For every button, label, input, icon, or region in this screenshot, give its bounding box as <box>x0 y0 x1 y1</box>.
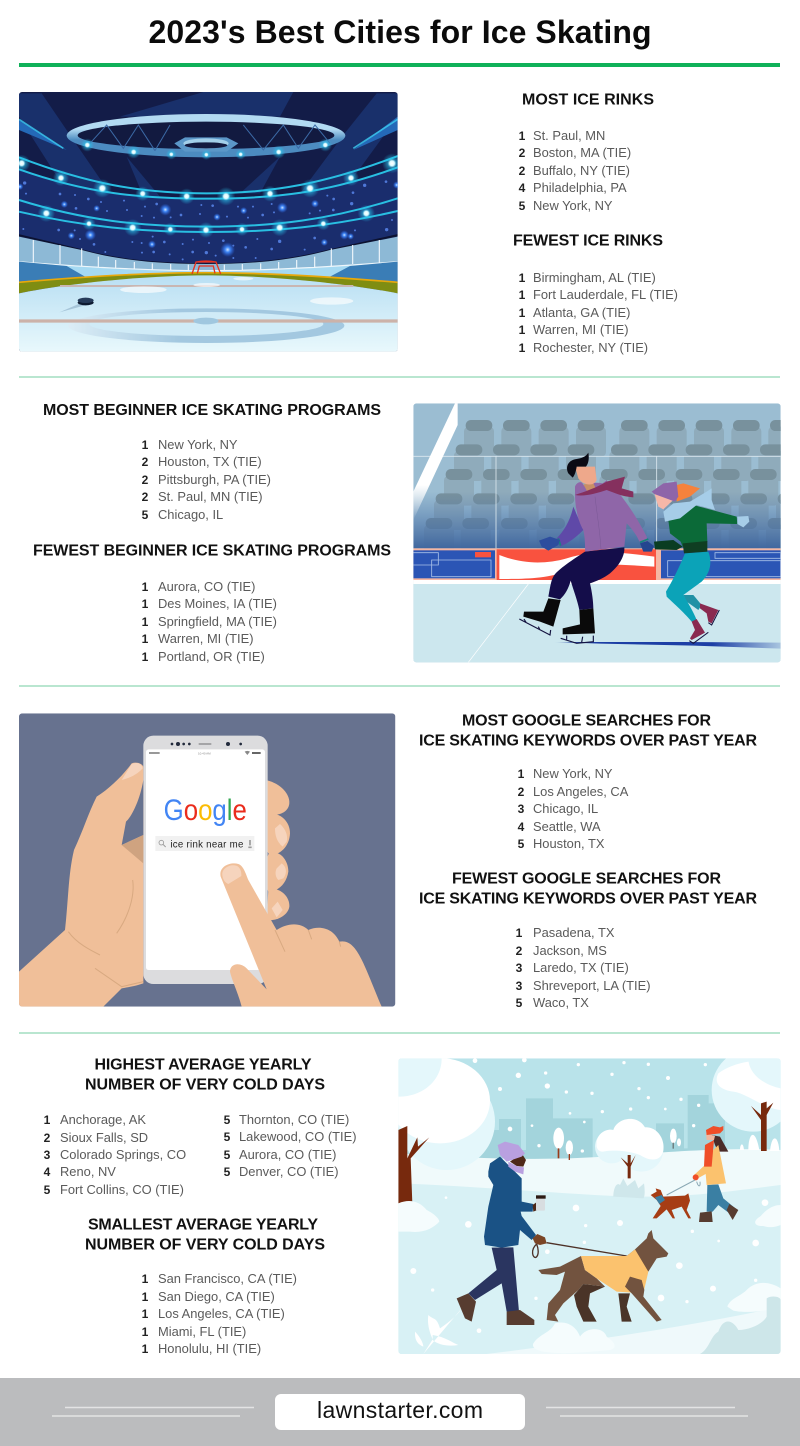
ranking list: 2 <box>519 164 526 178</box>
footer website: lawnstarter.com <box>317 1397 483 1423</box>
ranking list: 1 <box>519 271 526 285</box>
ranking list: Springfield, MA (TIE) <box>158 614 277 629</box>
title underline <box>19 63 780 67</box>
ranking list: Los Angeles, CA <box>533 784 629 799</box>
panel: fewest ice rinks <box>513 232 678 355</box>
leaves <box>415 1308 462 1354</box>
ranking list <box>142 437 271 522</box>
ranking list: 1 <box>519 323 526 337</box>
heading: MOST GOOGLE SEARCHES FOR <box>462 712 711 730</box>
ranking list <box>142 1271 297 1356</box>
ranking list, left column: 4 <box>44 1165 51 1179</box>
ranking list: New York, NY <box>533 766 613 781</box>
heading line 2: ICE SKATING KEYWORDS OVER PAST YEAR <box>419 890 757 908</box>
ranking list: 4 <box>518 820 525 834</box>
ranking list: 1 <box>519 341 526 355</box>
ranking list, right column: 5 <box>224 1130 231 1144</box>
ranking list: 4 <box>519 181 526 195</box>
phone <box>143 736 268 984</box>
footer band <box>0 1378 800 1446</box>
ranking list: Los Angeles, CA (TIE) <box>158 1306 285 1321</box>
ranking list: Jackson, MS <box>533 943 607 958</box>
ranking list: 5 <box>519 199 526 213</box>
ranking list: 5 <box>516 996 523 1010</box>
trees <box>398 1058 781 1204</box>
woman skater <box>652 482 749 643</box>
large dog with coat <box>538 1230 668 1322</box>
ranking list, right column: Denver, CO (TIE) <box>239 1164 339 1179</box>
left hand <box>19 763 143 1007</box>
ranking list <box>516 925 650 1010</box>
ranking list: 1 <box>142 632 149 646</box>
ranking list, left column: 5 <box>44 1183 51 1197</box>
ranking list: Philadelphia, PA <box>533 180 627 195</box>
heading: FEWEST ICE RINKS <box>513 232 663 250</box>
right hand pointing <box>220 863 382 1007</box>
ranking list: Atlanta, GA (TIE) <box>533 305 630 320</box>
ranking list, left column: Reno, NV <box>60 1164 116 1179</box>
ranking list: San Francisco, CA (TIE) <box>158 1271 297 1286</box>
ranking list: Rochester, NY (TIE) <box>533 340 648 355</box>
title: 2023's Best Cities for Ice Skating <box>148 14 652 50</box>
heading line 2: NUMBER OF VERY COLD DAYS <box>85 1076 325 1094</box>
ranking list, left column: 3 <box>44 1148 51 1162</box>
ranking list, right column: 5 <box>224 1148 231 1162</box>
ranking list: 1 <box>519 129 526 143</box>
ranking list: 1 <box>516 926 523 940</box>
ranking list: 1 <box>142 615 149 629</box>
illustration: phone google search <box>19 713 395 1007</box>
ranking list: New York, NY <box>158 437 238 452</box>
ranking list: Chicago, IL <box>533 801 598 816</box>
ranking list: 5 <box>142 508 149 522</box>
ranking list: Portland, OR (TIE) <box>158 649 265 664</box>
ranking list: 2 <box>519 146 526 160</box>
ranking list: 3 <box>516 961 523 975</box>
google logo: Google <box>164 793 247 826</box>
search bar <box>155 836 254 851</box>
heading: SMALLEST AVERAGE YEARLY <box>88 1216 318 1234</box>
ranking list: 1 <box>142 1325 149 1339</box>
heading line 2: NUMBER OF VERY COLD DAYS <box>85 1236 325 1254</box>
snowflakes <box>410 1058 768 1333</box>
ranking list: 3 <box>518 802 525 816</box>
ranking list: 1 <box>519 288 526 302</box>
ranking list, left column: Sioux Falls, SD <box>60 1130 148 1145</box>
person with blue jacket <box>457 1142 627 1325</box>
ranking list, left column: Fort Collins, CO (TIE) <box>60 1182 184 1197</box>
ranking list: Buffalo, NY (TIE) <box>533 163 630 178</box>
small dog <box>651 1188 691 1218</box>
illustration: couple skating <box>413 403 800 664</box>
ranking list: St. Paul, MN <box>533 128 605 143</box>
ranking list: Warren, MI (TIE) <box>533 322 628 337</box>
ranking list: Pittsburgh, PA (TIE) <box>158 472 271 487</box>
ranking list: San Diego, CA (TIE) <box>158 1289 275 1304</box>
ranking list: 2 <box>518 785 525 799</box>
ranking list: 2 <box>516 944 523 958</box>
ranking list: Houston, TX (TIE) <box>158 454 262 469</box>
illustration: hockey arena <box>13 92 402 352</box>
ranking list, right column: Thornton, CO (TIE) <box>239 1112 349 1127</box>
illustration: walking dogs in snow <box>390 1048 795 1354</box>
ranking list, left column: 2 <box>44 1131 51 1145</box>
ranking list: Laredo, TX (TIE) <box>533 960 629 975</box>
ranking list: 2 <box>142 490 149 504</box>
fingers behind phone <box>268 780 290 920</box>
panel: fewest google searches <box>419 870 757 1010</box>
ranking list: Waco, TX <box>533 995 589 1010</box>
ranking list, left column: Colorado Springs, CO <box>60 1147 186 1162</box>
ranking list: 1 <box>142 580 149 594</box>
ranking list: Honolulu, HI (TIE) <box>158 1341 261 1356</box>
ranking list: 2 <box>142 473 149 487</box>
ranking list, left column: Anchorage, AK <box>60 1112 146 1127</box>
ranking list: 1 <box>142 1307 149 1321</box>
person in yellow coat <box>667 1126 738 1222</box>
panel: most beginner programs <box>43 402 381 522</box>
ranking list: Warren, MI (TIE) <box>158 631 253 646</box>
ranking list: Birmingham, AL (TIE) <box>533 270 656 285</box>
heading: HIGHEST AVERAGE YEARLY <box>94 1056 312 1074</box>
heading: MOST BEGINNER ICE SKATING PROGRAMS <box>43 402 381 419</box>
ranking list: Shreveport, LA (TIE) <box>533 978 650 993</box>
ranking list: 5 <box>518 837 525 851</box>
ranking list: 2 <box>142 455 149 469</box>
ranking list: New York, NY <box>533 198 613 213</box>
heading: MOST ICE RINKS <box>522 92 654 108</box>
heading: FEWEST GOOGLE SEARCHES FOR <box>452 870 721 888</box>
ranking list, right column <box>224 1112 356 1179</box>
panel: fewest beginner programs <box>33 542 391 664</box>
ranking list: Seattle, WA <box>533 819 601 834</box>
heading: FEWEST BEGINNER ICE SKATING PROGRAMS <box>33 542 391 560</box>
ranking list, right column: Lakewood, CO (TIE) <box>239 1129 356 1144</box>
ranking list, left column <box>44 1112 186 1197</box>
search bar: ice rink near me <box>170 839 243 850</box>
panel: most ice rinks <box>519 92 654 213</box>
ranking list: Houston, TX <box>533 836 605 851</box>
phone: 10:40 AM <box>198 752 211 756</box>
ranking list, right column: 5 <box>224 1165 231 1179</box>
ranking list: 1 <box>142 1290 149 1304</box>
ranking list: St. Paul, MN (TIE) <box>158 489 263 504</box>
man skater <box>519 453 654 643</box>
ranking list: Pasadena, TX <box>533 925 615 940</box>
ranking list: 3 <box>516 979 523 993</box>
ranking list <box>518 766 629 851</box>
ranking list: 1 <box>142 1272 149 1286</box>
ranking list: Miami, FL (TIE) <box>158 1324 246 1339</box>
ranking list: 1 <box>142 650 149 664</box>
ranking list: Aurora, CO (TIE) <box>158 579 255 594</box>
ranking list <box>519 128 631 213</box>
snow mounds <box>398 1201 781 1353</box>
panel: most google searches <box>419 712 757 851</box>
ranking list, left column: 1 <box>44 1113 51 1127</box>
ranking list: Chicago, IL <box>158 507 223 522</box>
footer button <box>275 1394 525 1430</box>
ranking list <box>519 270 678 355</box>
heading line 2: ICE SKATING KEYWORDS OVER PAST YEAR <box>419 732 757 750</box>
ranking list: 1 <box>518 767 525 781</box>
ranking list: 1 <box>142 597 149 611</box>
ranking list: Boston, MA (TIE) <box>533 145 631 160</box>
ranking list: 1 <box>142 438 149 452</box>
panel: most very cold days <box>44 1056 356 1197</box>
ranking list: 1 <box>142 1342 149 1356</box>
ranking list, right column: 5 <box>224 1113 231 1127</box>
ranking list: Des Moines, IA (TIE) <box>158 596 277 611</box>
panel: fewest very cold days <box>85 1216 325 1356</box>
ranking list, right column: Aurora, CO (TIE) <box>239 1147 336 1162</box>
ranking list <box>142 579 277 664</box>
ranking list: 1 <box>519 306 526 320</box>
ranking list: Fort Lauderdale, FL (TIE) <box>533 287 678 302</box>
